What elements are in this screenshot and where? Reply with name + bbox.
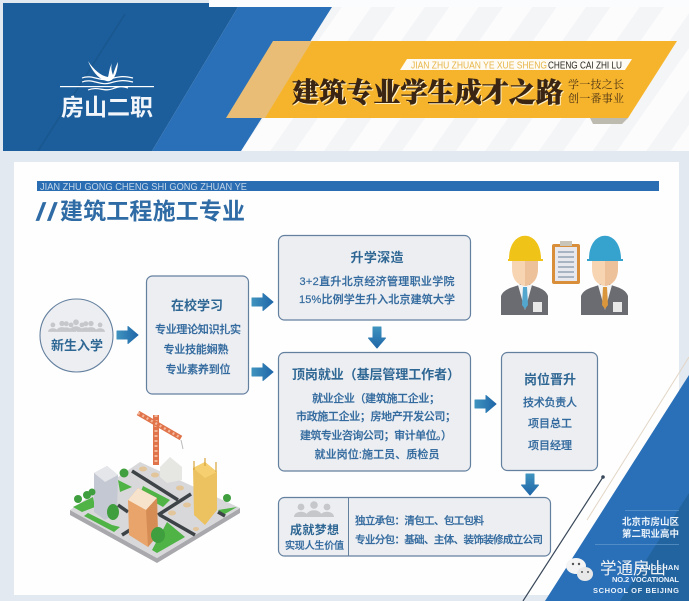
arrow: down to 顶岗就业 [368,327,386,348]
panel: 升学深造 [278,236,470,320]
construction: white block [160,457,182,483]
arrow: to 顶岗就业 [252,364,273,380]
header band [3,0,689,151]
panel: 在校学习: 在校学习 [171,298,223,313]
corner school name: NO.2 VOCATIONAL [612,575,679,584]
arrow: down to 成就梦想 [522,474,538,495]
icon: students [48,319,105,332]
panel: 成就梦想: 独立承包：清包工、包工包料 [355,514,484,527]
panel: 岗位晋升: 岗位晋升 [524,372,576,387]
banner [226,41,677,124]
city construction illustration [70,413,240,563]
corner school name: SCHOOL OF BEIJING [593,586,679,595]
panel: 顶岗就业: 就业企业（建筑施工企业； [312,391,440,405]
panel: 岗位晋升 [502,352,598,470]
corner school name [593,510,679,595]
section heading: // [36,199,57,226]
corner blue decoration [523,357,689,601]
banner slogan: 学一技之长 [568,77,624,91]
panel: 成就梦想: 成就梦想 [290,522,339,537]
banner slogan: 创一番事业 [568,91,624,105]
tower: yellow [193,458,217,525]
panel: 在校学习: 专业技能娴熟 [164,342,228,356]
school logo [60,61,154,120]
panel: 在校学习: 专业理论知识扎实 [155,322,241,336]
clipboard [552,241,580,284]
circle: 新生入学: 新生入学 [51,338,103,353]
panel: 岗位晋升: 项目经理 [528,439,572,452]
panel: 成就梦想: 专业分包：基础、主体、装饰装修成立公司 [355,533,543,546]
corner school name: FANGSHAN [635,563,679,572]
wechat watermark: 学通房山 [600,559,666,578]
worker: blue helmet [581,236,628,315]
panel: 岗位晋升: 技术负责人 [523,395,577,409]
panel: 顶岗就业 [278,352,470,471]
arrow: to 在校学习 [117,326,138,344]
panel: 成就梦想: 实现人生价值 [285,539,344,552]
panel: 在校学习: 专业素养到位 [166,362,230,376]
panel: 顶岗就业: 顶岗就业（基层管理工作者） [292,367,460,382]
arrow: to 升学深造 [252,294,273,310]
panel: 岗位晋升: 项目总工 [528,416,572,430]
section bar [37,181,659,193]
corner school name: 第二职业高中 [622,528,679,540]
banner title: 建筑专业学生成才之路 [292,77,563,108]
tower crane [138,413,183,465]
circle: 新生入学 [40,299,113,372]
panel: 升学深造: 3+2直升北京经济管理职业学院 [300,274,454,288]
tower: orange [128,488,158,547]
school logo: 房山二职 [61,94,153,120]
banner pinyin strip: JIAN ZHU ZHUAN YE XUE SHENG [411,60,547,72]
icon: people [294,501,334,517]
panel: 升学深造: 升学深造 [350,250,404,265]
banner slogan [568,77,624,105]
main white panel [14,162,679,595]
workers illustration [501,236,628,315]
panel: 成就梦想 [278,498,550,556]
panel: 顶岗就业: 就业岗位:施工员、质检员 [314,447,440,461]
arrow: to 岗位晋升 [475,396,496,412]
banner pinyin strip [400,59,632,72]
panel: 在校学习 [146,276,248,394]
panel: 顶岗就业: 市政施工企业；房地产开发公司； [296,409,456,423]
tower: grey [94,466,118,520]
section bar: JIAN ZHU GONG CHENG SHI GONG ZHUAN YE [40,182,247,193]
section heading: 建筑工程施工专业 [60,198,245,224]
corner school name: 北京市房山区 [622,516,679,528]
panel: 升学深造: 15%比例学生升入北京建筑大学 [299,292,455,306]
wechat watermark [566,558,666,581]
panel: 顶岗就业: 建筑专业咨询公司；审计单位。） [300,428,452,442]
trees [74,468,231,543]
banner pinyin strip: CHENG CAI ZHI LU [548,60,622,72]
worker: yellow helmet [501,236,548,315]
